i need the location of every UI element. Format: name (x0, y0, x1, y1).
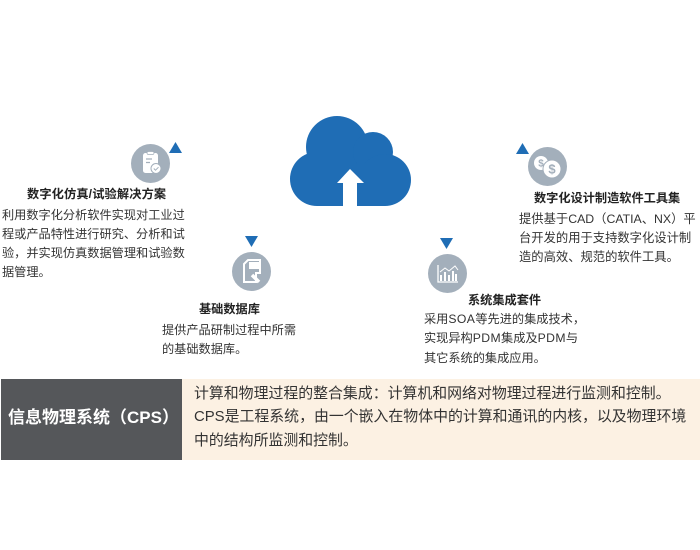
description text (194, 385, 686, 449)
body text: 造的高效、规范的软件工具。 (519, 250, 679, 264)
panel: system integration suite (424, 238, 585, 365)
icon: coins: $ (538, 158, 544, 170)
description text: 计算和物理过程的整合集成：计算机和网络对物理过程进行监测和控制。 (194, 386, 671, 402)
marker triangle up (516, 143, 529, 154)
body text: 提供基于CAD（CATIA、NX）平 (519, 212, 696, 226)
panel: digital design software tools (516, 143, 696, 264)
marker triangle up (169, 142, 182, 153)
marker triangle down (440, 238, 453, 249)
CPS title: 信息物理系统（CPS） (8, 408, 179, 427)
body text: 台开发的用于支持数字化设计制 (519, 231, 691, 245)
icon: coins (528, 147, 567, 186)
body text: 据管理。 (2, 265, 51, 279)
marker triangle down (245, 236, 258, 247)
body text: 提供产品研制过程中所需 (162, 323, 296, 337)
panel: CPS label (1, 379, 182, 460)
body text (424, 312, 585, 365)
panel: base database (162, 236, 296, 356)
heading: 系统集成套件 (468, 293, 541, 307)
body text: 利用数字化分析软件实现对工业过 (2, 208, 185, 222)
icon: coins: $ (548, 162, 556, 176)
panel: CPS description (182, 379, 700, 460)
body text: 采用SOA等先进的集成技术， (424, 312, 585, 326)
body text (162, 323, 296, 356)
heading: 数字化仿真/试验解决方案 (27, 187, 166, 201)
body text: 其它系统的集成应用。 (424, 351, 546, 365)
panel: simulation solutions (2, 142, 185, 279)
body text: 程或产品特性进行研究、分析和试 (2, 227, 185, 241)
heading: 基础数据库 (199, 302, 260, 316)
body text (519, 212, 696, 264)
heading: 数字化设计制造软件工具集 (534, 191, 680, 205)
body text: 实现异构PDM集成及PDM与 (424, 331, 578, 345)
icon: clipboard check (131, 144, 170, 183)
body text: 验，并实现仿真数据管理和试验数 (2, 246, 185, 260)
body text (2, 208, 185, 279)
body text: 的基础数据库。 (162, 342, 247, 356)
description text: 中的结构所监测和控制。 (194, 433, 358, 449)
description text: CPS是工程系统，由一个嵌入在物体中的计算和通讯的内核，以及物理环境 (194, 409, 686, 425)
icon: bar and line chart (428, 254, 467, 293)
icon: document with magnifier (232, 252, 271, 291)
